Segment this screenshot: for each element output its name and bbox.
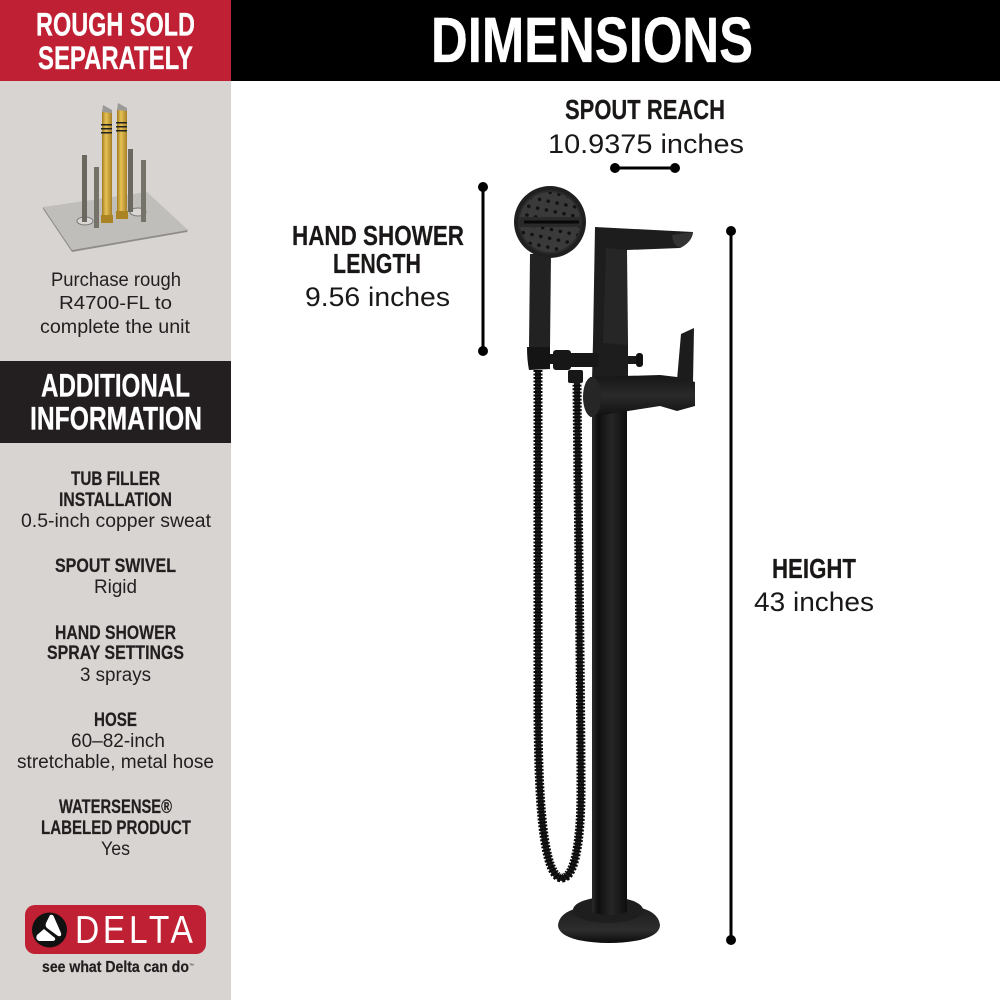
spec: spout swivel: SPOUT SWIVEL [55,556,176,577]
banner: dimensions title [231,0,1000,81]
arrow: hand shower dimension line [478,182,488,356]
label: hand shower length: LENGTH [333,248,421,279]
arrow: height dimension line [726,226,736,945]
label: hand shower length: HAND SHOWER [292,220,464,251]
spec: tub filler installation: INSTALLATION [59,490,172,511]
spec: spout swivel: Rigid [94,577,137,598]
shower handle [527,254,551,370]
bracket [549,350,599,383]
heading: additional information: ADDITIONAL [41,368,190,404]
text: purchase rough note [40,270,191,338]
label: height: 43 inches [754,587,874,617]
heading: additional information [0,361,231,443]
logo: delta: see what Delta can do [42,959,189,976]
spec: hose: stretchable, metal hose [17,752,214,773]
logo: delta [25,905,206,976]
shower head [514,186,586,258]
banner: rough sold separately [0,0,231,81]
logo: delta: ™ [189,963,194,969]
spec: tub filler installation [21,469,212,532]
spec: spout swivel [55,556,176,598]
label: spout reach [548,94,744,159]
lever handle body [583,328,695,417]
spec: hose: HOSE [94,710,137,731]
icon: rough valve product image [43,103,188,252]
spec: hand shower spray settings [47,623,184,686]
spec: tub filler installation: 0.5-inch copper sweat [21,511,212,532]
label: spout reach: SPOUT REACH [565,94,725,125]
banner: rough sold separately: SEPARATELY [38,40,193,76]
label: height: HEIGHT [772,553,856,584]
label: spout reach: 10.9375 inches [548,129,744,159]
banner: dimensions title: DIMENSIONS [431,4,753,76]
spec: hose [17,710,214,773]
hose [538,370,581,878]
spec: watersense labeled product: Yes [101,839,130,860]
spec: watersense labeled product [41,797,191,860]
arrow: spout reach dimension line [610,163,680,173]
text: purchase rough note: R4700-FL to [59,292,172,313]
panel: left sidebar [0,0,231,1000]
base [558,897,660,943]
heading: additional information: INFORMATION [30,400,202,436]
banner: rough sold separately: ROUGH SOLD [36,6,195,42]
spec: hose: 60–82-inch [71,731,165,752]
spec: watersense labeled product: WATERSENSE® [59,797,172,818]
side knob [627,353,643,367]
label: height [754,553,874,617]
text: purchase rough note: Purchase rough [51,270,181,291]
text: purchase rough note: complete the unit [40,317,191,338]
spec: hand shower spray settings: SPRAY SETTINGS [47,643,184,664]
spout [592,227,693,380]
spec: watersense labeled product: LABELED PRODUCT [41,818,191,839]
column [592,380,627,915]
spec: hand shower spray settings: HAND SHOWER [55,623,176,644]
label: hand shower length [292,220,464,312]
product: floor-mount tub filler faucet [514,186,695,943]
spec: hand shower spray settings: 3 sprays [80,665,151,686]
label: hand shower length: 9.56 inches [305,282,450,312]
spec: tub filler installation: TUB FILLER [71,469,160,490]
logo: delta: DELTA [75,908,197,952]
